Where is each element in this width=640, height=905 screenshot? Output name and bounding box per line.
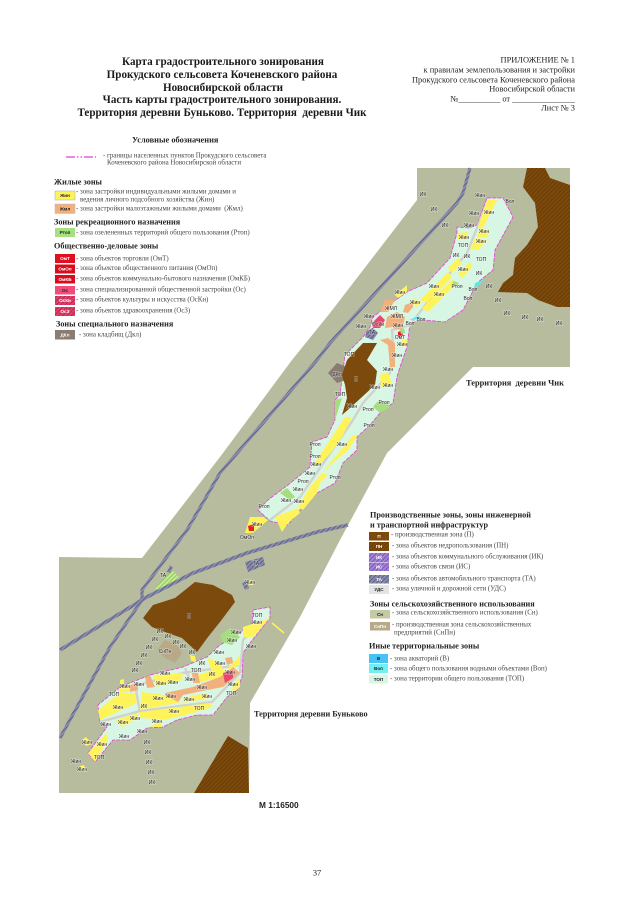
transport line A	[60, 168, 470, 738]
map labels: П	[187, 614, 191, 620]
other zones heading: Иные территориальные зоны	[369, 642, 480, 650]
map labels: ИК	[486, 284, 492, 290]
green recreation plot	[220, 628, 240, 645]
map labels: Жин	[434, 292, 444, 298]
legend: SnPn: предприятий (СнПн)	[394, 630, 455, 636]
title	[77, 56, 367, 119]
map labels: ИК	[537, 317, 543, 323]
map labels: Жин	[130, 716, 140, 722]
map labels: Жин	[459, 235, 469, 241]
map labels: ТОП	[458, 243, 469, 249]
green recreation plots	[280, 281, 459, 500]
map background	[59, 168, 570, 793]
legend: IK	[369, 553, 543, 562]
map labels: ИК	[180, 644, 186, 650]
map labels: П	[354, 377, 358, 383]
legend: Sn: Сн	[377, 612, 383, 617]
legend: DKl: ДКл	[60, 332, 70, 338]
legend: V: - зона акваторий (В)	[390, 656, 449, 662]
map labels: ИК	[495, 298, 501, 304]
map labels: Жин	[370, 385, 380, 391]
legend: IS: - зона объектов связи (ИС)	[392, 564, 470, 570]
map labels: ИК	[476, 271, 482, 277]
village outline	[88, 607, 270, 762]
title: Карта градостроительного зонирования	[122, 56, 324, 68]
legend: Vop: - зона общего пользования водными объектами (Воп)	[390, 666, 547, 672]
map labels: ИК	[136, 661, 142, 667]
map labels: Жин	[197, 685, 207, 691]
legend: OsKi	[55, 296, 208, 305]
legend: TOP: - зона территории общего пользования (ТОП)	[390, 676, 524, 682]
legend: IK: ИК	[376, 555, 382, 560]
legend: P	[369, 532, 474, 540]
map labels: ИК	[420, 192, 426, 198]
legend: Zhin: Жин	[59, 193, 70, 198]
legend: Zhml: Жмл	[59, 206, 70, 212]
legend: Sn: - зона сельскохозяйственного использования (Сн)	[392, 610, 538, 616]
hatched green zone	[155, 570, 180, 590]
map labels: ТОП	[109, 692, 120, 698]
map labels: Жин	[118, 720, 128, 726]
map labels: ИК	[522, 315, 528, 321]
title: Новосибирской области	[163, 82, 284, 94]
red zone Omop	[248, 524, 254, 531]
map labels: ИК	[173, 640, 179, 646]
map labels: ИК	[504, 311, 510, 317]
legend: P: - производственная зона (П)	[391, 532, 474, 538]
map labels: ИК	[148, 770, 154, 776]
map labels: Вол	[464, 296, 473, 302]
legend: Rtop	[55, 228, 250, 237]
production heading: Производственные зоны, зоны инженерной	[370, 510, 531, 520]
legend: Rtop: Ртоп	[60, 230, 71, 235]
map labels: ТА	[160, 573, 167, 579]
map labels: Жин	[169, 709, 179, 715]
map labels: ИК	[157, 629, 163, 635]
legend: DKl: - зона кладбищ (Дкл)	[79, 332, 141, 338]
map labels: ОмТ	[395, 335, 405, 341]
map labels: Жин	[168, 680, 178, 686]
legend: Rtop: - зона озелененных территорий общего пользования (Ртоп)	[76, 230, 250, 236]
production heading	[370, 510, 531, 530]
title: Часть карты градостроительного зонирования.	[103, 94, 342, 106]
map labels: Жин	[392, 353, 402, 359]
map labels: Жин	[137, 729, 147, 735]
orange low-rise plots	[130, 657, 240, 702]
map labels: ИК	[431, 207, 437, 213]
map labels: Жин	[246, 644, 256, 650]
legend: Sn	[370, 610, 538, 618]
public business heading: Общественно-деловые зоны	[54, 242, 159, 250]
map labels: Жин	[185, 677, 195, 683]
map labels: Жин	[160, 671, 170, 677]
legend: PN: - зона объектов недропользования (ПН)	[392, 542, 508, 550]
village Chik	[245, 198, 513, 533]
map labels: Жин	[153, 696, 163, 702]
legend: OsKi: - зона объектов культуры и искусства (ОсКи)	[76, 296, 208, 304]
map labels: Жин	[214, 650, 224, 656]
appendix note: №__________ от _______________	[450, 94, 576, 104]
map labels: ИК	[165, 634, 171, 640]
appendix note	[412, 56, 576, 112]
map labels: Жин	[245, 580, 255, 586]
map labels: ИК	[141, 704, 147, 710]
legend: OsZ: ОсЗ	[60, 309, 70, 314]
map scale: М 1:16500	[259, 800, 299, 810]
legend: OsZ: - зона объектов здравоохранения (ОсЗ)	[76, 308, 190, 314]
map labels: ОмОп	[240, 535, 254, 541]
appendix note: Прокудского сельсовета Коченевского района	[412, 76, 575, 84]
map labels: Жин	[410, 300, 420, 306]
map labels: ТОП	[335, 392, 346, 398]
agricultural enterprise zone	[157, 640, 182, 663]
map labels: Жин	[429, 284, 439, 290]
map labels: ИК	[442, 223, 448, 229]
map labels: ТА	[253, 561, 260, 567]
map labels: Жин	[383, 367, 393, 373]
title: Прокудского сельсовета Коченевского района	[107, 69, 338, 81]
yellow residential plots	[245, 200, 497, 533]
village outline	[258, 198, 513, 525]
legend: Os: - зона специализированной общественной застройки (Ос)	[76, 286, 246, 294]
appendix note: Лист № 3	[541, 104, 575, 112]
map labels: ТОП	[191, 668, 202, 674]
trade zone	[398, 330, 403, 337]
roads	[100, 620, 262, 722]
legend: PN	[369, 542, 508, 551]
legend: OmT	[55, 254, 169, 263]
legend: OmT: - зона объектов торговли (ОмТ)	[76, 256, 169, 262]
legend: OmKB: - зона объектов коммунально-бытового назначения (ОмКБ)	[76, 276, 250, 282]
map labels: Жин	[484, 210, 494, 216]
map labels: ДКл	[332, 372, 342, 378]
map labels: Ртоп	[309, 442, 321, 448]
map labels: Жин	[383, 383, 393, 389]
legend: boundary line	[66, 152, 266, 166]
map labels: ТОП	[226, 691, 237, 697]
map labels: ИК	[144, 740, 150, 746]
legend: boundary line: Коченевского района Новосибирской области	[107, 160, 241, 166]
map labels: ТА	[369, 330, 376, 336]
map labels: Жин	[356, 324, 366, 330]
legend: boundary line: - границы населенных пунктов Прокудского сельсовета	[103, 152, 266, 160]
map labels: ТОП	[252, 613, 263, 619]
legend: Zhin	[55, 188, 236, 204]
map labels: Жин	[228, 682, 238, 688]
map labels: Жин	[479, 229, 489, 235]
map labels: ЖМЛ	[385, 306, 397, 312]
map labels: Жин	[311, 462, 321, 468]
map labels: Ртоп	[309, 454, 321, 460]
map labels: ИК	[152, 637, 158, 643]
map labels: Жин	[225, 670, 235, 676]
production zone Bunkovo	[143, 582, 235, 652]
legend: Os: Ос	[62, 288, 69, 293]
map labels: ИК	[149, 780, 155, 786]
map labels: Жин	[252, 620, 262, 626]
legend: TOP: ТОП	[374, 677, 383, 682]
legend: UDS: УДС	[374, 587, 384, 592]
legend: Vop: Воп	[374, 666, 383, 671]
orange low-rise plots	[380, 300, 413, 367]
map labels: Ртоп	[297, 479, 309, 485]
map labels: Жин	[347, 404, 357, 410]
map labels: ИК	[209, 672, 215, 678]
map labels: Жин	[476, 239, 486, 245]
map labels	[71, 192, 562, 786]
legend: IS: ИС	[376, 564, 383, 569]
map labels: Жин	[397, 342, 407, 348]
legend: TA: - зона объектов автомобильного транспорта (ТА)	[392, 576, 536, 582]
agriculture heading: Зоны сельскохозяйственного использования	[370, 600, 535, 608]
water strips	[409, 279, 485, 320]
map labels: Жин	[156, 681, 166, 687]
map labels: Жин	[77, 767, 87, 773]
map labels: Жин	[120, 684, 130, 690]
legend: P: П	[377, 534, 381, 539]
map labels: Ртоп	[378, 400, 390, 406]
map labels: ИК	[453, 253, 459, 259]
map labels: Жин	[231, 630, 241, 636]
map labels: Жин	[82, 740, 92, 746]
legend: Vop	[369, 664, 547, 673]
map labels: Жин	[166, 694, 176, 700]
map labels: Жин	[458, 267, 468, 273]
legend: PN: ПН	[376, 544, 383, 549]
map labels: ОсКи	[372, 322, 384, 328]
roads	[270, 203, 487, 520]
appendix note: к правилам землепользования и застройки	[424, 66, 576, 74]
legend: V	[369, 654, 449, 663]
legend: OmOp: ОмОп	[58, 266, 72, 272]
legend: Zhin: - зона застройки индивидуальными жилыми домами и	[76, 188, 236, 196]
map labels: Ртоп	[362, 407, 374, 413]
recreation heading: Зоны рекреационного назначения	[54, 218, 181, 226]
transport line B	[60, 525, 348, 650]
legend: IK: - зона объектов коммунального обслуживания (ИК)	[392, 554, 543, 560]
map labels: Жин	[395, 290, 405, 296]
cemetery zone	[328, 363, 347, 383]
map labels: Ртоп	[258, 504, 270, 510]
map labels: Вол	[417, 317, 426, 323]
map labels: Жин	[469, 211, 479, 217]
legend: OmOp	[55, 264, 217, 274]
outlying plots	[80, 580, 253, 771]
legend: DKl	[55, 330, 141, 340]
map labels: ИК	[141, 653, 147, 659]
appendix note: Новосибирской области	[489, 84, 576, 94]
village Bunkovo	[80, 580, 284, 771]
legend: left column	[54, 136, 266, 340]
map labels: Жин	[134, 682, 144, 688]
map labels: ТОП	[476, 257, 487, 263]
transport zones	[167, 557, 265, 590]
map labels: СнПн	[159, 649, 172, 655]
production zone Chik	[342, 343, 377, 415]
legend: OmT: ОмТ	[60, 256, 70, 261]
map labels: Вол	[469, 287, 478, 293]
culture zone	[372, 315, 385, 328]
legend heading: Условные обозначения	[132, 136, 219, 144]
legend: SnPn	[370, 622, 532, 636]
legend: OsKi: ОсКи	[59, 298, 71, 303]
brown zone north-east	[498, 168, 570, 307]
map labels: ИК	[146, 760, 152, 766]
map labels: Жин	[252, 522, 262, 528]
map labels: ТОП	[194, 706, 205, 712]
map labels: Ртоп	[451, 284, 463, 290]
map labels: Ртоп	[363, 423, 375, 429]
legend: SnPn: СнПн	[374, 624, 386, 629]
legend: Zhin: ведения личного подсобного хозяйства (Жин)	[80, 196, 214, 204]
map labels: ТОП	[344, 352, 355, 358]
label: territory Chik: Территория деревни Чик	[466, 378, 564, 388]
legend: SnPn: - производственная зона сельскохозяйственных	[392, 622, 532, 628]
map labels: ИК	[199, 661, 205, 667]
map labels: Жин	[281, 498, 291, 504]
map labels: Жин	[113, 705, 123, 711]
map labels: ИК	[189, 650, 195, 656]
map labels: Жин	[227, 638, 237, 644]
legend: OmOp: - зона объектов общественного питания (ОмОп)	[76, 265, 217, 272]
map labels: ИК	[146, 645, 152, 651]
map labels: Ртоп	[329, 475, 341, 481]
legend: Zhml	[55, 204, 243, 214]
map labels: Жин	[464, 223, 474, 229]
legend: IS	[369, 562, 470, 571]
map labels: Вол	[406, 321, 415, 327]
legend: Zhml: - зона застройки малоэтажными жилыми домами (Жмл)	[76, 206, 243, 212]
map labels: ЖМЛ	[391, 314, 403, 320]
map labels: Жин	[364, 314, 374, 320]
transport zone	[365, 328, 378, 340]
map labels: ИК	[464, 254, 470, 260]
map labels: Жин	[305, 471, 315, 477]
map labels: Жин	[393, 323, 403, 329]
map labels: ИК	[145, 750, 151, 756]
map labels: Жин	[184, 697, 194, 703]
legend: UDS	[369, 585, 506, 594]
legend: V: В	[377, 656, 381, 661]
title: Территория деревни Буньково. Территория деревни Чик	[77, 107, 367, 119]
legend: right column	[369, 510, 547, 684]
special zones heading: Зоны специального назначения	[56, 320, 174, 328]
map labels: ТОП	[94, 755, 105, 761]
residential heading: Жилые зоны	[54, 178, 103, 186]
map labels: Жин	[101, 722, 111, 728]
legend: OmKB: ОмКБ	[58, 277, 72, 282]
map labels: Жин	[293, 487, 303, 493]
legend: TA: ТА	[376, 577, 383, 582]
map labels: Жин	[71, 759, 81, 765]
label: territory Bunkovo: Территория деревни Буньково	[254, 710, 368, 718]
map labels: ИК	[556, 321, 562, 327]
production heading: и транспортной инфраструктур	[370, 520, 489, 530]
yellow spur	[272, 623, 284, 633]
map labels: Вол	[506, 199, 515, 205]
map labels: Жин	[97, 742, 107, 748]
map labels: Жин	[202, 694, 212, 700]
map labels: Жин	[475, 193, 485, 199]
page number: 37	[313, 868, 321, 878]
map labels: Жин	[337, 442, 347, 448]
map	[59, 168, 570, 793]
map labels: Жин	[119, 734, 129, 740]
legend: OsZ	[55, 307, 190, 316]
map labels: Жин	[215, 661, 225, 667]
yellow residential plots	[88, 618, 270, 762]
map labels: Жин	[152, 719, 162, 725]
red zones	[223, 670, 233, 683]
map labels: Жин	[294, 499, 304, 505]
brown zone south	[194, 736, 249, 793]
legend: UDS: - зона уличной и дорожной сети (УДС)	[392, 586, 506, 592]
map labels: ИК	[132, 668, 138, 674]
appendix note: ПРИЛОЖЕНИЕ № 1	[501, 56, 575, 64]
